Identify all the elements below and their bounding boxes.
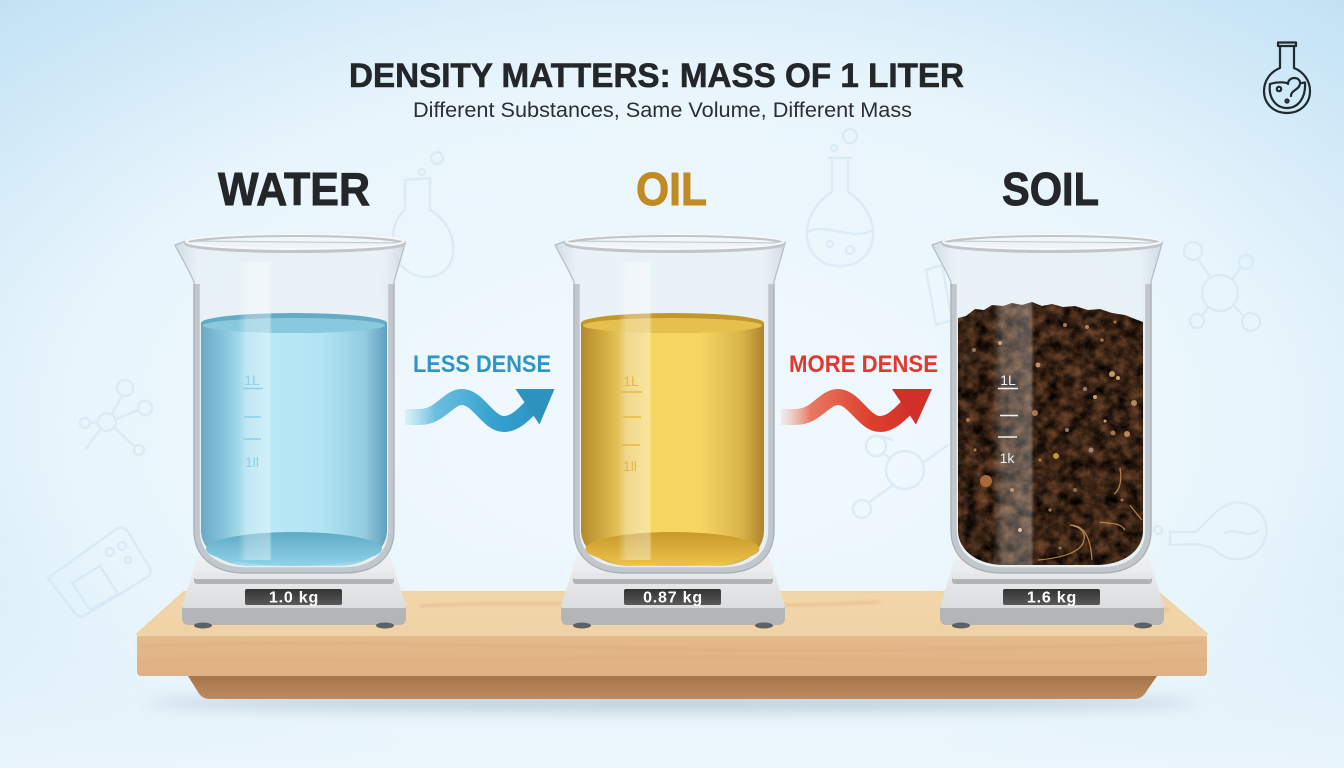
scale: soil (940, 556, 1164, 628)
icon: flask with question mark (1264, 42, 1310, 113)
column heading: soil: SOIL (1002, 163, 1099, 215)
scale: soil: 1.6 kg (1027, 590, 1077, 606)
wooden table (137, 592, 1207, 699)
label: less dense: LESS DENSE (413, 351, 551, 378)
soil roots (1038, 468, 1142, 560)
scale: water (182, 556, 406, 628)
beaker: oil (555, 234, 785, 573)
scale: oil: 0.87 kg (643, 590, 703, 606)
graduation marks: soil: 1L (1000, 372, 1016, 388)
graduation marks: oil: 1L (623, 373, 639, 389)
column heading: water: WATER (218, 163, 370, 215)
graduation marks: soil: 1k (1000, 450, 1015, 466)
graduation marks: oil: 1ll (623, 458, 637, 474)
title: DENSITY MATTERS: MASS OF 1 LITER (349, 57, 964, 95)
beaker: water (175, 234, 405, 573)
scale: oil (561, 556, 785, 628)
label: more dense: MORE DENSE (789, 351, 938, 378)
arrow: more dense (781, 389, 932, 424)
graduation marks: soil (998, 372, 1018, 466)
subtitle: Different Substances, Same Volume, Different Mass (413, 99, 912, 122)
graduation marks: water: 1ll (245, 454, 259, 470)
graduation marks: water (243, 372, 263, 470)
beaker: soil (932, 234, 1162, 573)
arrow: less dense (405, 389, 554, 424)
shadow under table (147, 694, 1197, 712)
graduation marks: oil (621, 373, 642, 474)
graduation marks: water: 1L (244, 372, 260, 388)
soil specks (966, 320, 1137, 550)
scale: water: 1.0 kg (269, 590, 319, 606)
decorative faint science icons (48, 129, 1266, 616)
column heading: oil: OIL (636, 163, 707, 215)
